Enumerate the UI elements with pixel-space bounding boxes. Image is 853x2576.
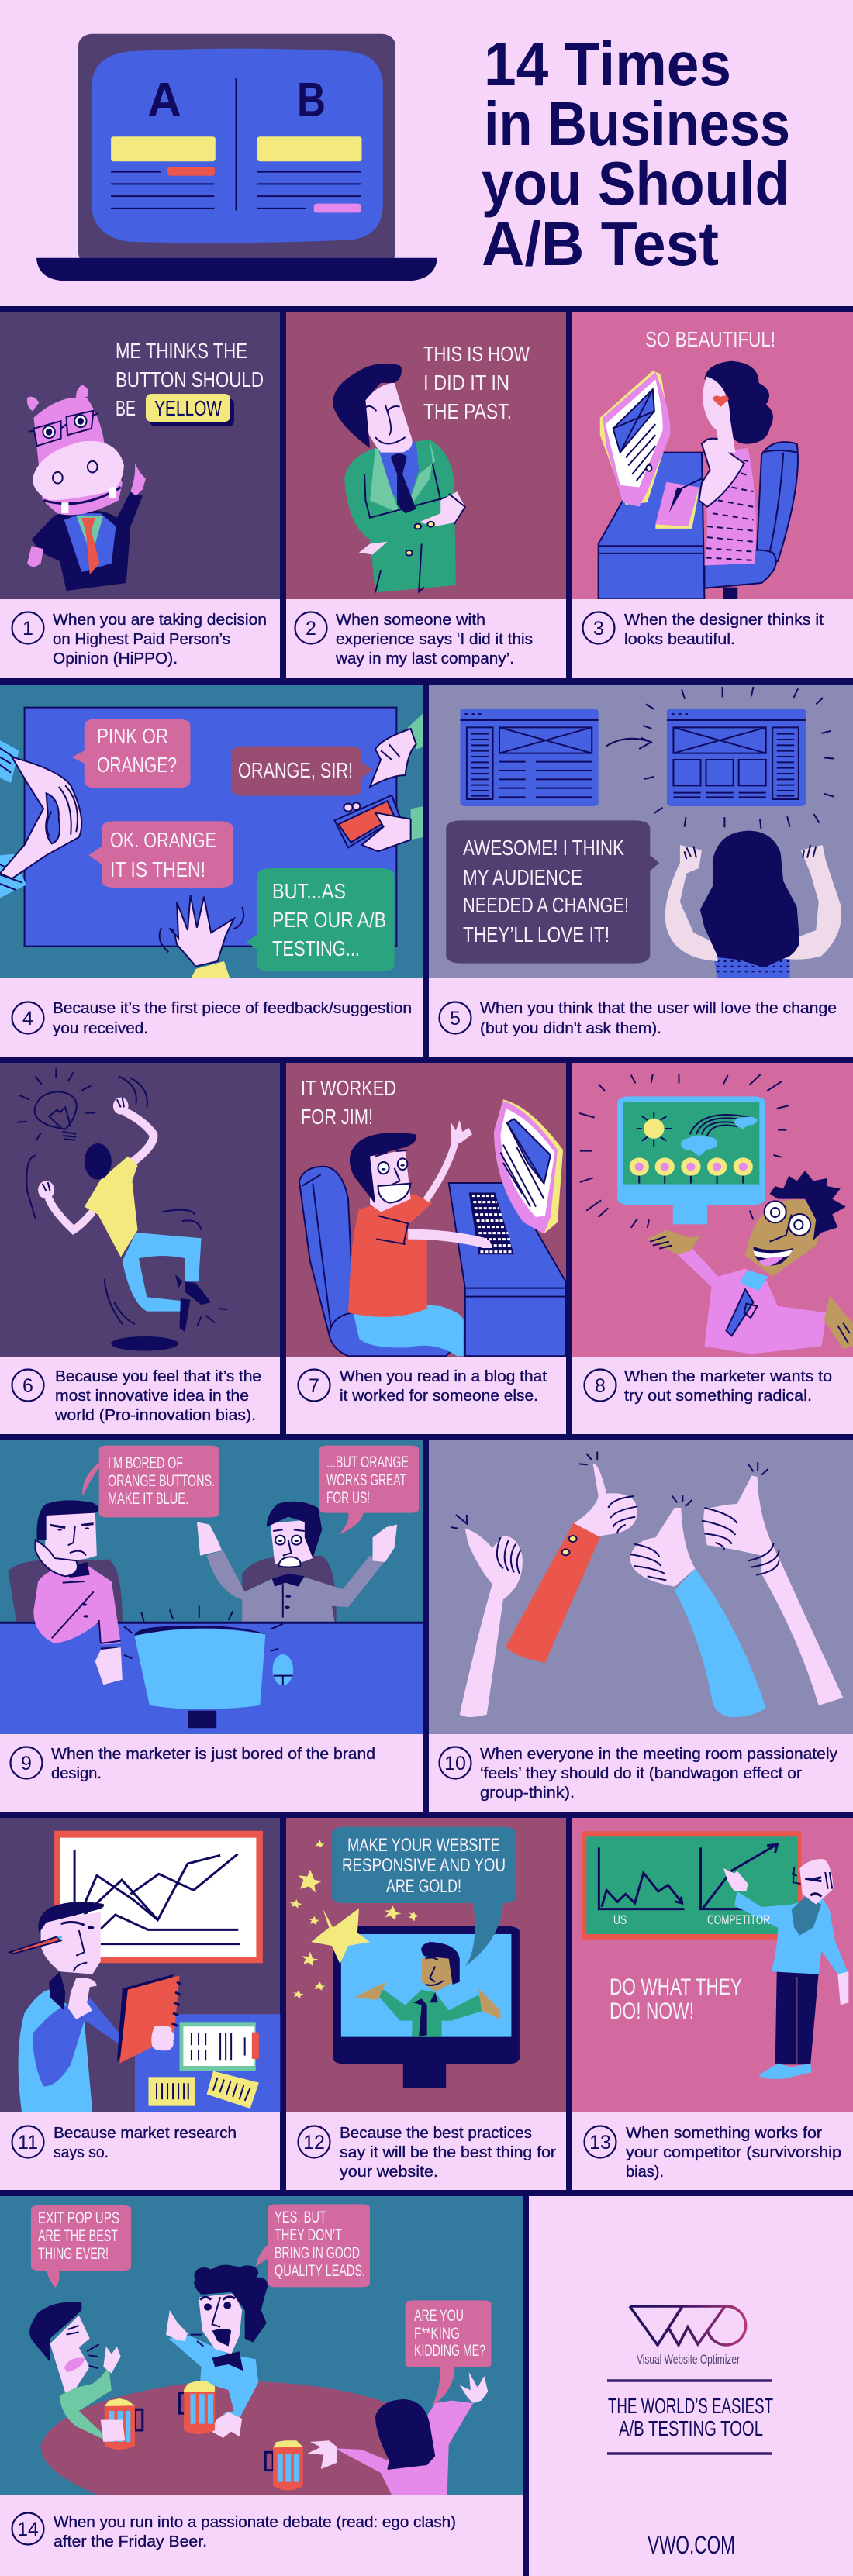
logo: VWO	[630, 2306, 746, 2367]
caption 3: looks beautiful.	[624, 630, 735, 648]
tagline: THE WORLD’S EASIEST	[608, 2394, 773, 2418]
board and speech text: DO WHAT THEY	[610, 1974, 742, 2000]
illustration: marketer and monitor	[579, 1074, 853, 1354]
caption 12: say it will be the best thing for	[340, 2143, 556, 2161]
illustration: hippo in suit	[27, 385, 146, 591]
caption 5: When you think that the user will love the change	[480, 999, 837, 1017]
caption 12: your website.	[340, 2163, 438, 2181]
title	[482, 29, 790, 278]
title: 14 Times	[484, 29, 731, 98]
speech bubbles text: ORANGE?	[97, 753, 177, 777]
panel 7: blog	[286, 1063, 566, 1434]
panel 1: HiPPO	[0, 312, 280, 678]
speech bubbles text: ARE THE BEST	[38, 2227, 118, 2245]
caption 4	[0, 978, 423, 1057]
speech bubbles text	[38, 2209, 485, 2360]
speech bubble text: RESPONSIVE AND YOU	[342, 1855, 506, 1876]
caption 6	[0, 1357, 280, 1434]
speech bubbles text: THING EVER!	[38, 2245, 109, 2263]
caption 13	[572, 2112, 853, 2190]
speech text	[116, 339, 264, 426]
caption 2: way in my last company’.	[335, 650, 514, 667]
caption 4: Because it’s the first piece of feedback/suggestion	[53, 999, 412, 1017]
tagline: A/B TESTING TOOL	[619, 2416, 763, 2440]
caption 13: When something works for	[626, 2124, 822, 2142]
caption 5: (but you didn't ask them).	[480, 1019, 661, 1037]
caption 13: your competitor (survivorship	[626, 2143, 841, 2161]
caption 10: 10	[444, 1753, 466, 1774]
caption 8	[572, 1357, 853, 1434]
speech text	[423, 342, 530, 423]
caption 5: 5	[450, 1008, 461, 1029]
speech bubbles text: TESTING...	[272, 936, 360, 960]
caption 2: experience says ‘I did it this	[336, 630, 533, 648]
caption 10: group-think).	[480, 1784, 575, 1802]
board and speech text: US	[613, 1912, 627, 1927]
speech bubbles text: THEY DON’T	[275, 2226, 342, 2244]
caption 1: 1	[22, 618, 33, 640]
panel 11: market research	[0, 1818, 280, 2190]
panel 6: pro-innovation bias	[0, 1063, 280, 1434]
caption 1: Opinion (HiPPO).	[53, 650, 178, 667]
speech text: BE	[116, 396, 136, 420]
speech text: SO BEAUTIFUL!	[645, 327, 775, 351]
website address: VWO.COM	[648, 2531, 735, 2559]
speech bubble text: ARE GOLD!	[386, 1876, 461, 1897]
caption 10: ‘feels’ they should do it (bandwagon effect or	[480, 1764, 802, 1782]
speech text: THE PAST.	[423, 399, 512, 423]
speech text: FOR JIM!	[301, 1105, 373, 1129]
speech bubbles text: IT IS THEN!	[110, 857, 205, 881]
illustration: man with chart and notebook	[10, 1831, 280, 2112]
caption 7	[286, 1357, 566, 1434]
tagline	[607, 2381, 773, 2454]
speech text: BUTTON SHOULD	[116, 367, 264, 391]
caption 14: after the Friday Beer.	[54, 2533, 207, 2550]
caption 6: world (Pro-innovation bias).	[54, 1406, 256, 1424]
speech bubbles text: BRING IN GOOD	[275, 2244, 360, 2262]
panel: VWO branding	[607, 2306, 773, 2559]
speech bubbles text	[97, 724, 386, 960]
panel 14: ego clash	[0, 2196, 523, 2576]
speech bubbles text: ORANGE BUTTONS.	[108, 1472, 215, 1490]
panel 10: bandwagon	[429, 1440, 853, 1812]
caption 12: 12	[303, 2132, 325, 2154]
caption 2	[286, 599, 566, 678]
caption 3: When the designer thinks it	[624, 611, 824, 629]
illustration: designer at desk	[599, 361, 798, 599]
caption 8: 8	[595, 1375, 606, 1397]
caption 2: When someone with	[336, 611, 485, 629]
caption 5	[429, 978, 853, 1057]
panel 8: radical	[572, 1063, 853, 1434]
speech bubbles text: ...BUT ORANGE	[326, 1454, 409, 1471]
caption 3	[572, 599, 853, 678]
speech bubbles text: ORANGE, SIR!	[238, 758, 353, 782]
speech bubbles text: F**KING	[414, 2325, 460, 2343]
panel 2: experience	[286, 312, 566, 678]
speech bubbles text: KIDDING ME?	[414, 2342, 485, 2360]
caption 9	[0, 1734, 423, 1812]
icon: laptop with A/B test: A	[147, 74, 181, 127]
speech bubble text: NEEDED A CHANGE!	[463, 893, 629, 917]
speech text: THIS IS HOW	[423, 342, 530, 366]
caption 8: When the marketer wants to	[624, 1367, 832, 1385]
caption 1: on Highest Paid Person’s	[53, 630, 230, 648]
title: A/B Test	[482, 209, 719, 278]
caption 9: When the marketer is just bored of the brand	[51, 1745, 375, 1763]
speech bubbles text: FOR US!	[326, 1489, 370, 1507]
panel 13: competitor	[572, 1818, 853, 2190]
speech bubbles text	[108, 1454, 409, 1508]
caption 14: When you run into a passionate debate (read: ego clash)	[54, 2513, 456, 2531]
illustration: debate over beers	[29, 2204, 491, 2495]
speech bubbles text: OK. ORANGE	[110, 828, 216, 852]
illustration: excited man at computer	[299, 1099, 566, 1356]
speech bubbles text: PINK OR	[97, 724, 168, 748]
caption 11: Because market research	[54, 2124, 237, 2142]
speech bubbles text: I’M BORED OF	[108, 1454, 183, 1472]
title: in Business	[484, 89, 790, 158]
header	[36, 29, 790, 281]
illustration: man on monitor with stars	[289, 1827, 520, 2088]
caption 9: design.	[51, 1764, 102, 1782]
speech bubble text: THEY’LL LOVE IT!	[463, 922, 610, 947]
caption 11	[0, 2112, 280, 2190]
icon: laptop with A/B test: B	[297, 74, 326, 127]
title: you Should	[482, 149, 789, 218]
caption 7: When you read in a blog that	[340, 1367, 547, 1385]
illustration: man in green suit	[333, 364, 465, 592]
caption 8: try out something radical.	[624, 1387, 812, 1405]
illustration: man at chalkboard	[582, 1831, 848, 2079]
speech text: IT WORKED	[301, 1076, 396, 1100]
panel 3: designer	[572, 312, 853, 678]
caption 2: 2	[306, 618, 316, 640]
illustration: wireframes and woman	[446, 687, 841, 978]
caption 12: Because the best practices	[340, 2124, 532, 2142]
panel 4: first feedback	[0, 685, 423, 1057]
speech bubbles text: MAKE IT BLUE.	[108, 1490, 188, 1508]
panel 12: best practices	[286, 1818, 566, 2190]
caption 11: says so.	[54, 2143, 109, 2161]
caption 6: most innovative idea in the	[55, 1387, 249, 1405]
speech bubbles text: BUT...AS	[272, 879, 346, 903]
caption 3: 3	[593, 618, 604, 640]
caption 12	[286, 2112, 566, 2190]
speech text: I DID IT IN	[423, 371, 509, 395]
caption 4: you received.	[53, 1019, 148, 1037]
caption 11: 11	[18, 2132, 38, 2154]
caption 10	[429, 1734, 853, 1812]
board and speech text: DO! NOW!	[610, 1998, 694, 2024]
speech text: ME THINKS THE	[116, 339, 247, 363]
caption 1: When you are taking decision	[53, 611, 267, 629]
speech bubbles text: YES, BUT	[275, 2209, 326, 2226]
caption 7: it worked for someone else.	[340, 1387, 538, 1405]
speech bubble text: MY AUDIENCE	[463, 865, 582, 889]
speech bubbles text: ARE YOU	[414, 2307, 464, 2325]
illustration: two marketers at desk	[0, 1446, 423, 1734]
illustration: hands around meeting screen	[0, 708, 423, 978]
speech bubble text	[342, 1835, 506, 1897]
speech bubble text	[463, 836, 629, 947]
speech bubbles text: QUALITY LEADS.	[275, 2262, 365, 2280]
illustration: dancing man with light bulb	[17, 1068, 227, 1351]
caption 14: 14	[17, 2519, 39, 2540]
caption 4: 4	[22, 1008, 33, 1029]
caption 6: 6	[22, 1375, 33, 1397]
caption 13: 13	[589, 2132, 611, 2154]
speech bubble text: MAKE YOUR WEBSITE	[347, 1835, 500, 1856]
board and speech text: COMPETITOR	[707, 1912, 770, 1927]
speech bubble text: AWESOME! I THINK	[463, 836, 624, 860]
speech text: YELLOW	[154, 396, 222, 420]
logo: VWO: Visual Website Optimizer	[637, 2352, 740, 2367]
speech bubbles text: EXIT POP UPS	[38, 2209, 119, 2227]
illustration: four thumbs up	[451, 1452, 843, 1717]
speech text	[301, 1076, 396, 1129]
caption 1	[0, 599, 280, 678]
panel 9: bored of brand	[0, 1440, 423, 1812]
icon: laptop with A/B test	[36, 34, 437, 281]
board and speech text	[610, 1912, 770, 2024]
speech bubbles text: WORKS GREAT	[326, 1471, 406, 1489]
caption 10: When everyone in the meeting room passionately	[480, 1745, 838, 1763]
caption 14	[0, 2495, 523, 2576]
speech bubbles text: PER OUR A/B	[272, 908, 386, 932]
caption 7: 7	[309, 1375, 319, 1397]
caption 6: Because you feel that it’s the	[55, 1367, 261, 1385]
caption 13: bias).	[626, 2163, 664, 2181]
caption 9: 9	[21, 1753, 32, 1774]
panel 5: user will love the change	[429, 685, 853, 1057]
